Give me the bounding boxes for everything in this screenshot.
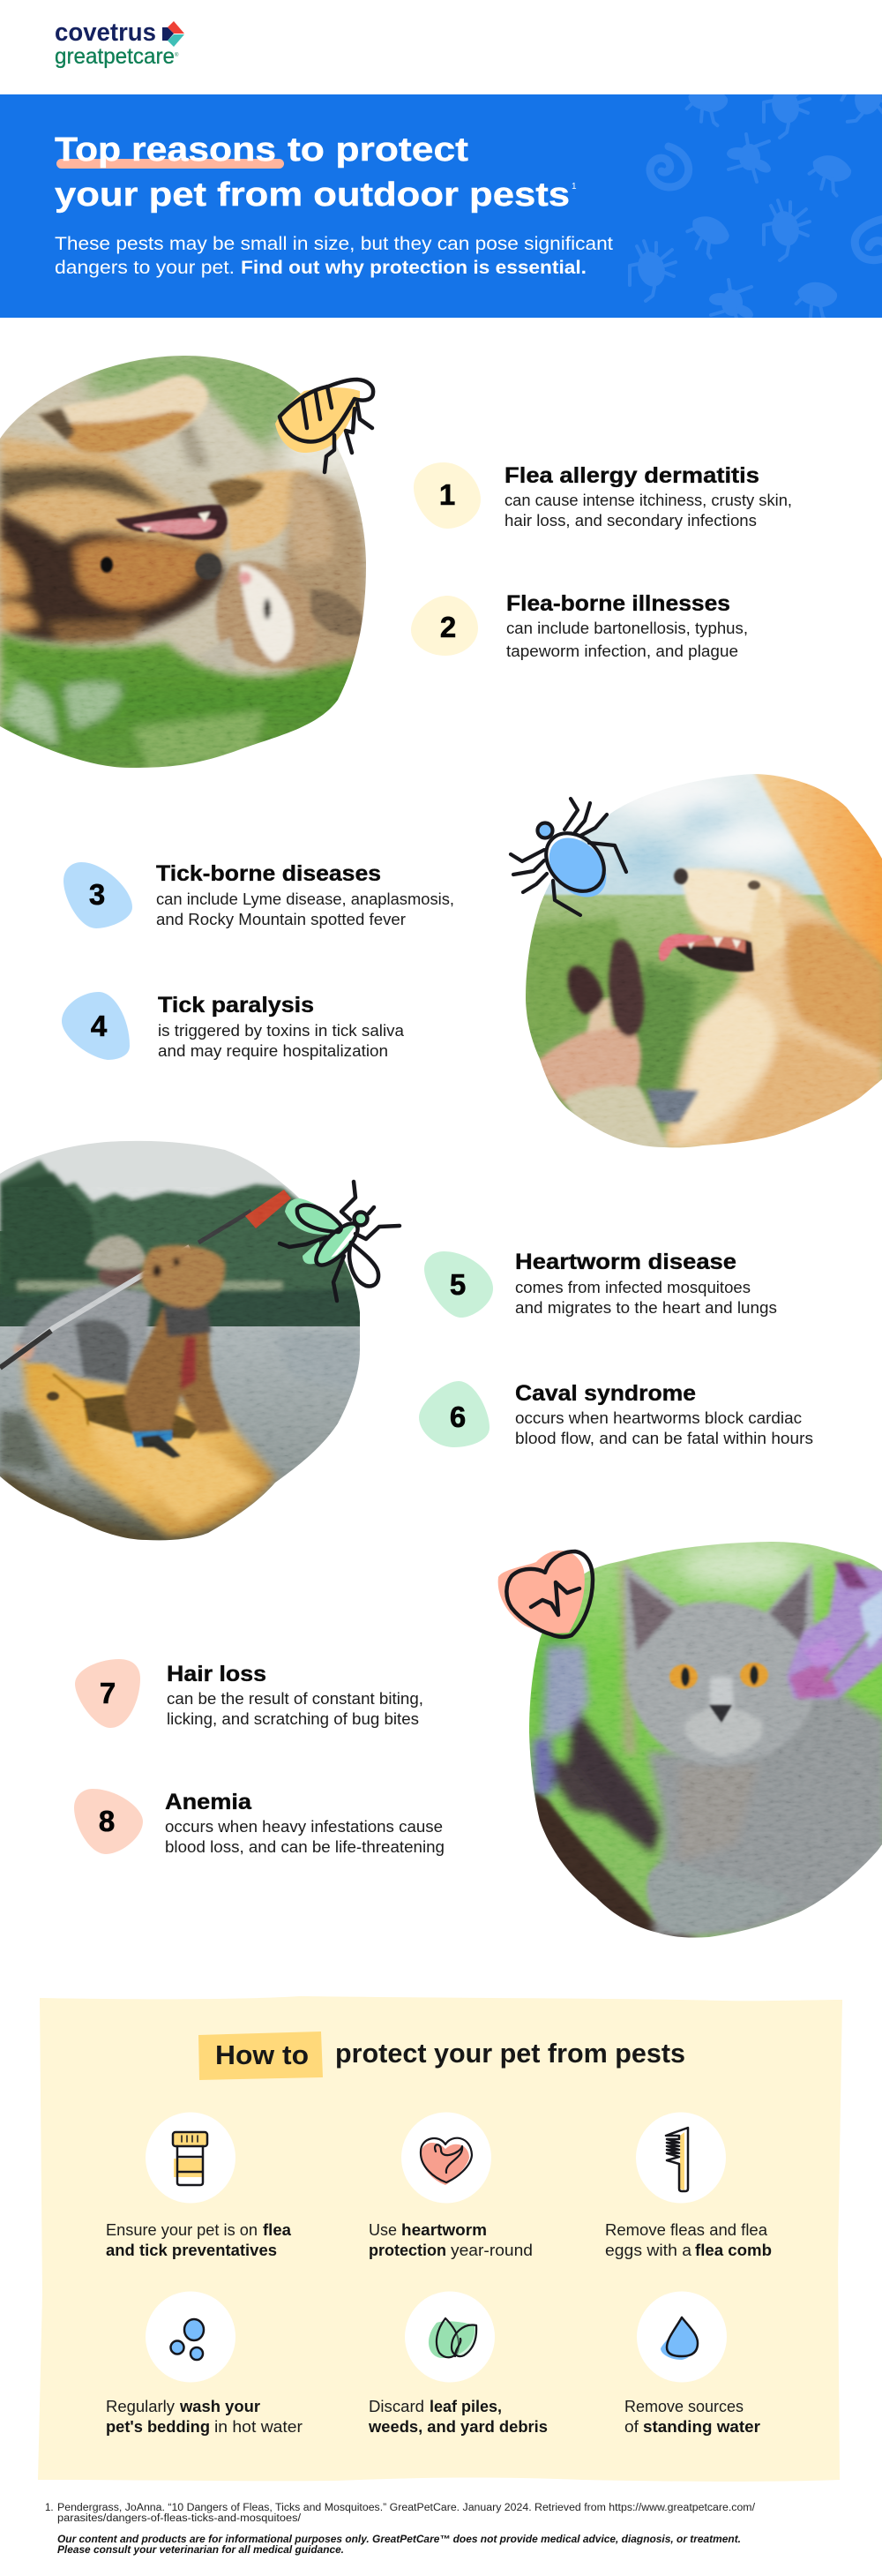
reason 8: Anemia	[165, 1790, 252, 1814]
reason 4: and may require hospitalization	[158, 1042, 388, 1060]
reason 2: 2	[440, 611, 456, 643]
reason 7: licking, and scratching of bug bites	[167, 1710, 419, 1728]
underline highlight	[56, 159, 284, 169]
reason 8	[74, 1789, 445, 1856]
reason 1	[414, 462, 792, 529]
cat	[282, 473, 366, 680]
reason 6	[419, 1381, 813, 1447]
number badge	[411, 596, 478, 656]
item: heartworm protection: protection	[369, 2242, 446, 2259]
intro text: Find out why protection is essential.	[241, 258, 587, 278]
dog front leg	[208, 470, 309, 552]
icon: comb	[666, 2128, 688, 2191]
dog	[123, 1245, 231, 1434]
photo: golden retriever at campsite	[520, 768, 882, 1155]
dog head	[0, 507, 225, 644]
number badge	[64, 862, 132, 928]
panel: hero banner	[0, 94, 882, 318]
item: standing water: of	[624, 2418, 639, 2436]
item: wash bedding: Regularly	[106, 2398, 175, 2415]
reason 2: Flea-borne illnesses	[506, 591, 730, 616]
reason 7: can be the result of constant biting,	[167, 1690, 423, 1708]
disclaimer: Our content and products are for informational purposes only. GreatPetCare™ does not provide medical advice, diagnosis, or treatment.	[57, 2535, 741, 2545]
reason 7	[75, 1659, 423, 1728]
intro text	[55, 234, 613, 278]
heading	[198, 2032, 685, 2080]
item: discard leaf piles	[368, 2291, 548, 2436]
reason 5: comes from infected mosquitoes	[515, 1279, 751, 1296]
footnotes: Pendergrass, JoAnna. “10 Dangers of Fleas, Ticks and Mosquitoes.” GreatPetCare. January 2024. Retrieved from https://www.greatpetcare.com/	[57, 2503, 756, 2513]
dog mouth	[659, 934, 754, 972]
reason 6: blood flow, and can be fatal within hours	[515, 1430, 813, 1447]
footnotes	[45, 2503, 756, 2556]
item: discard leaf piles: leaf piles,	[430, 2398, 502, 2415]
intro text: These pests may be small in size, but they can pose significant	[55, 234, 613, 254]
photo: dog on a kayak	[0, 1138, 362, 1544]
background pest pattern	[628, 94, 882, 318]
reason 3: 3	[89, 878, 105, 911]
item: flea comb: eggs with a	[605, 2242, 692, 2259]
dog mouth	[116, 505, 228, 540]
title: your pet from outdoor pests	[55, 176, 570, 214]
lilac flowers	[787, 1562, 882, 1699]
item: preventatives	[106, 2113, 292, 2259]
number badge	[419, 1381, 490, 1447]
reason 5: and migrates to the heart and lungs	[515, 1299, 777, 1317]
logo: covetrus and greatpetcare: ®	[175, 52, 179, 58]
tree trunk	[529, 1791, 706, 1941]
reason 4	[62, 992, 405, 1060]
disclaimer: Please consult your veterinarian for all medical guidance.	[57, 2545, 344, 2556]
footnotes: 1.	[45, 2503, 54, 2513]
item: heartworm protection	[369, 2113, 533, 2259]
item: wash bedding	[106, 2291, 303, 2436]
reason 5: 5	[450, 1268, 466, 1301]
intro text: dangers to your pet.	[55, 258, 235, 278]
reason 3: and Rocky Mountain spotted fever	[156, 911, 406, 928]
item: standing water	[624, 2291, 760, 2436]
logo: covetrus and greatpetcare	[55, 19, 184, 69]
reason 3	[64, 861, 454, 928]
reason 8: occurs when heavy infestations cause	[165, 1818, 443, 1836]
icon: tick	[511, 799, 626, 915]
reason 2: tapeworm infection, and plague	[506, 642, 738, 660]
heading: protect your pet from pests	[335, 2038, 685, 2069]
item: flea comb: flea comb	[695, 2242, 772, 2259]
item: wash bedding: wash your	[179, 2398, 260, 2415]
reason 6: Caval syndrome	[515, 1381, 696, 1406]
reason 5: Heartworm disease	[515, 1250, 736, 1274]
dog body	[657, 873, 882, 1152]
panel: how to protect your pet	[38, 1996, 842, 2482]
heading: How to	[215, 2039, 309, 2070]
title: 1	[572, 182, 577, 192]
cat head	[624, 1562, 816, 1765]
item: discard leaf piles: weeds, and yard debris	[368, 2418, 548, 2436]
cat body	[647, 1681, 882, 1937]
icon: flea	[275, 379, 373, 472]
reason 7: 7	[100, 1677, 116, 1709]
item: flea comb: Remove fleas and flea	[605, 2221, 768, 2239]
item: heartworm protection: year-round	[451, 2242, 533, 2259]
paddler	[13, 1235, 152, 1386]
icon: leaves	[429, 2318, 476, 2358]
reason 1: hair loss, and secondary infections	[505, 512, 757, 529]
icon: medicine bottle	[173, 2132, 207, 2185]
icon: heart with ECG line	[498, 1551, 593, 1637]
reason 2	[411, 591, 748, 660]
reason 4: is triggered by toxins in tick saliva	[158, 1022, 405, 1040]
reason 8: 8	[99, 1805, 115, 1837]
item: discard leaf piles: Discard	[369, 2398, 424, 2415]
reason 2: can include bartonellosis, typhus,	[506, 620, 748, 637]
reason 1: Flea allergy dermatitis	[505, 463, 759, 488]
item: standing water: standing water	[643, 2418, 760, 2436]
photo: dog and cat on grass	[0, 349, 370, 772]
number badge	[75, 1659, 140, 1728]
reason 1: can cause intense itchiness, crusty skin,	[505, 492, 792, 509]
item: heartworm protection: heartworm	[401, 2221, 487, 2239]
item: wash bedding: in hot water	[214, 2418, 303, 2436]
reason 6: 6	[450, 1401, 466, 1433]
title	[55, 131, 577, 214]
dog hind leg	[36, 375, 208, 454]
logo: covetrus and greatpetcare: greatpetcare	[55, 44, 175, 69]
item: wash bedding: pet's bedding	[106, 2418, 210, 2436]
number badge	[74, 1789, 143, 1854]
reason 4: Tick paralysis	[158, 993, 314, 1018]
reason 6: occurs when heartworms block cardiac	[515, 1409, 802, 1427]
title: to protect	[288, 131, 468, 169]
disclaimer	[57, 2535, 741, 2556]
item: preventatives: Ensure your pet is on	[106, 2221, 258, 2239]
icon: heart with worm	[421, 2138, 472, 2185]
item: preventatives: flea	[263, 2221, 292, 2239]
number badge	[62, 992, 130, 1060]
tent	[754, 772, 882, 971]
footnotes: parasites/dangers-of-fleas-ticks-and-mosquitoes/	[57, 2513, 302, 2524]
icon: mosquito	[280, 1182, 400, 1301]
reason 3: Tick-borne diseases	[156, 861, 381, 886]
title: Top reasons	[55, 131, 276, 169]
item: heartworm protection: Use	[369, 2221, 397, 2239]
reason 8: blood loss, and can be life-threatening	[165, 1838, 445, 1856]
item: flea comb	[605, 2113, 772, 2259]
logo: covetrus and greatpetcare: covetrus	[55, 19, 156, 47]
reason 4: 4	[91, 1010, 108, 1042]
item: standing water: Remove sources	[624, 2398, 744, 2415]
icon: bubbles	[171, 2319, 204, 2360]
kayak	[22, 1341, 275, 1536]
photo: grey cat in a tree	[525, 1540, 882, 1941]
icon: water drop	[661, 2317, 698, 2360]
shoes and leg	[534, 939, 699, 1152]
icon: covetrus mark	[162, 21, 184, 47]
paddle	[0, 1247, 190, 1368]
reason 3: can include Lyme disease, anaplasmosis,	[156, 890, 454, 908]
number badge	[414, 462, 481, 529]
reason 7: Hair loss	[167, 1662, 266, 1686]
number badge	[424, 1251, 493, 1318]
reason 1: 1	[439, 478, 455, 511]
reason 5	[424, 1250, 777, 1318]
item: preventatives: and tick preventatives	[106, 2242, 277, 2259]
grass	[0, 634, 366, 772]
